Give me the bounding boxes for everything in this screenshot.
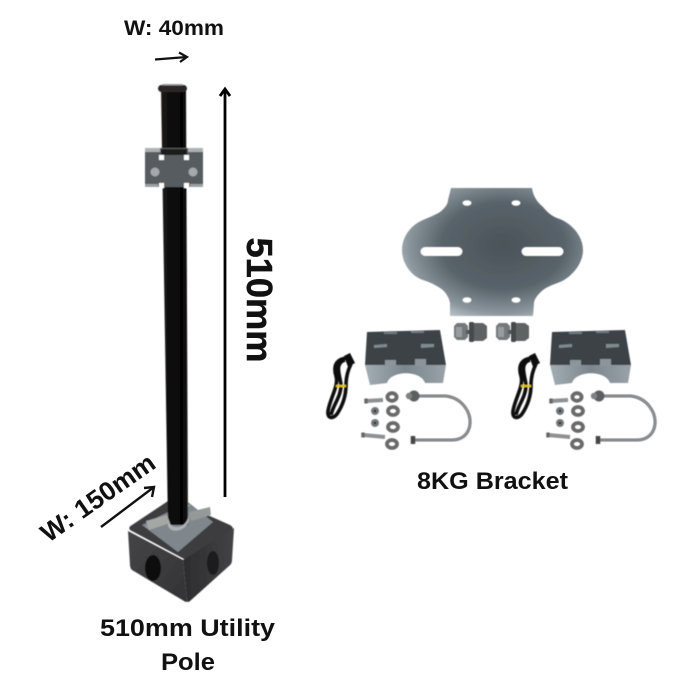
caption: bracket: 8KG Bracket — [417, 468, 568, 495]
caption: utility pole: Pole — [161, 649, 215, 676]
pole top cap — [158, 84, 187, 92]
mounting plate — [402, 188, 583, 316]
centre bolt set, right — [496, 322, 529, 342]
caption: utility pole: 510mm Utility — [100, 615, 275, 642]
caption: utility pole — [100, 615, 275, 676]
centre bolt set, left — [454, 322, 487, 342]
pole mounting bracket — [145, 148, 203, 188]
pole clamp on base — [146, 507, 211, 531]
label: pole width: W: 40mm — [124, 16, 224, 40]
product photo: 8KG bracket kit — [328, 188, 655, 448]
arrow: pole width — [155, 52, 187, 62]
product photo: utility pole — [128, 84, 234, 602]
bracket hardware kit, left — [328, 330, 470, 448]
arrow: base width — [101, 487, 154, 527]
bracket hardware kit, right — [513, 330, 655, 448]
arrow: pole height — [220, 89, 230, 497]
pole base block — [128, 500, 234, 602]
label: base width: W: 150mm — [35, 447, 161, 548]
label: pole height: 510mm — [239, 237, 280, 363]
pole shaft — [161, 88, 188, 525]
